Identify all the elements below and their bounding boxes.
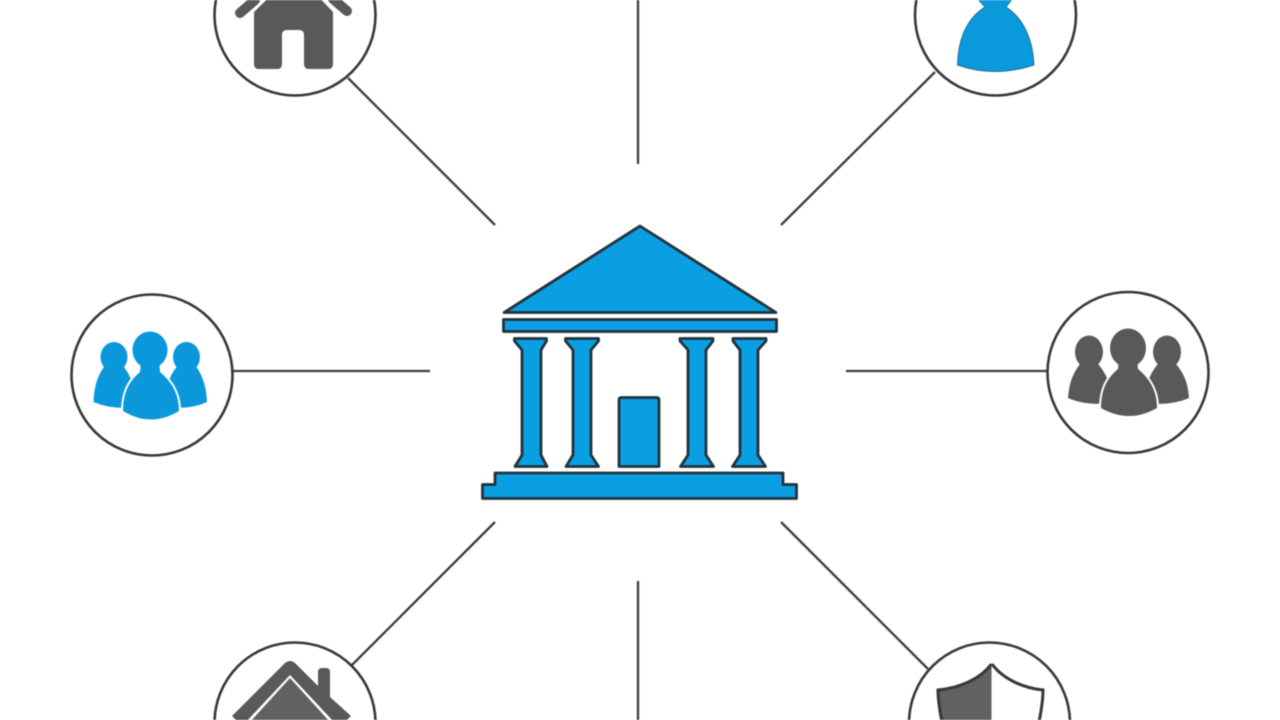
icon: central bank building [482, 226, 796, 498]
node: top left house [214, 0, 376, 96]
building door [619, 398, 659, 466]
building columns [514, 338, 766, 466]
node circle [909, 642, 1070, 720]
node circle [1048, 292, 1208, 453]
connector lines [233, 0, 1047, 720]
icon: blue people group [94, 332, 207, 420]
icon: gray people group [1068, 328, 1189, 416]
building beam [504, 320, 776, 332]
node: bottom right shield [909, 642, 1070, 720]
node circle [214, 0, 376, 96]
node circle [915, 0, 1076, 96]
node circle [72, 294, 232, 456]
node circle [214, 642, 376, 720]
building stepped base [482, 473, 796, 498]
node: right people group [1048, 292, 1208, 453]
node: bottom left house [214, 642, 376, 720]
icon: blue person [958, 0, 1034, 72]
node: left people group [72, 294, 232, 456]
building roof [504, 226, 776, 312]
node: top right person [915, 0, 1076, 96]
icon: house with chimney [232, 661, 351, 720]
icon: half filled shield [938, 664, 1043, 720]
icon: house [240, 0, 347, 69]
